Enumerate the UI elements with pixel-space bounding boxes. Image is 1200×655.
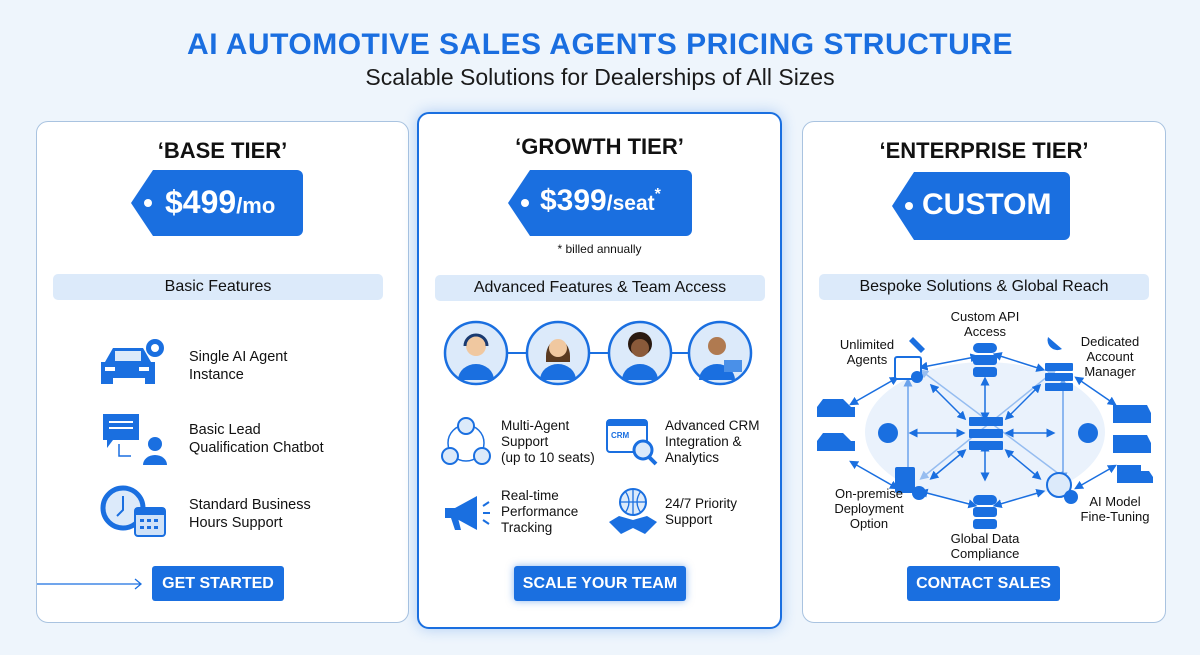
text: Real-time (501, 488, 559, 503)
text: Instance (189, 367, 244, 383)
network diagram: AI Model (1089, 494, 1141, 509)
price tag: $499/mo: $499/mo (165, 184, 275, 220)
panel: base tier (36, 121, 409, 623)
network diagram: Manager (1084, 364, 1136, 379)
price tag: custom: CUSTOM (922, 188, 1051, 221)
subtitle: Scalable Solutions for Dealerships of All Sizes (365, 64, 835, 90)
text (189, 497, 311, 531)
text: Support (501, 434, 548, 449)
icon: CRM window with magnifier: CRM (611, 431, 630, 440)
feature: CRM (606, 418, 760, 466)
text: (up to 10 seats) (501, 450, 595, 465)
network diagram: Compliance (951, 546, 1019, 561)
text: Tracking (501, 520, 552, 535)
network diagram: Unlimited (840, 337, 894, 352)
text: Performance (501, 504, 578, 519)
feature: priority support (609, 488, 737, 534)
text (189, 422, 324, 456)
text: Qualification Chatbot (189, 440, 324, 456)
feature: real-time tracking (445, 488, 578, 535)
icon: clock and calendar (100, 486, 166, 537)
button: scale your team: SCALE YOUR TEAM (523, 575, 677, 592)
button: get started: GET STARTED (162, 575, 274, 592)
text: Multi-Agent (501, 418, 569, 433)
text (665, 496, 737, 527)
band: advanced features: Advanced Features & Team Access (474, 279, 726, 296)
network diagram: Fine-Tuning (1081, 509, 1149, 524)
text (501, 488, 578, 535)
feature: multi-agent (441, 417, 595, 465)
arrow (37, 578, 142, 590)
panel: enterprise tier (802, 121, 1166, 623)
text: Hours Support (189, 515, 282, 531)
button: scale your team (514, 566, 686, 601)
network diagram: Option (850, 516, 888, 531)
button: contact sales: CONTACT SALES (916, 575, 1051, 592)
note: billed annually: * billed annually (557, 242, 642, 256)
panel: growth tier (417, 112, 782, 629)
band: basic features (53, 274, 383, 300)
network diagram: Dedicated (1081, 334, 1139, 349)
icon: megaphone (445, 496, 490, 530)
feature: single agent (101, 339, 288, 384)
feature: hours support (100, 486, 311, 537)
band: basic features: Basic Features (165, 278, 271, 295)
price tag: $499/mo (131, 170, 303, 236)
band: bespoke (819, 274, 1149, 300)
icon: globe handshake (609, 488, 657, 534)
text: Single AI Agent (189, 349, 287, 365)
text: Support (665, 512, 712, 527)
heading: growth tier: ‘GROWTH TIER’ (515, 134, 684, 159)
price tag: custom (892, 172, 1070, 240)
text: Integration & (665, 434, 742, 449)
text: 24/7 Priority (665, 496, 737, 511)
price tag: $399/seat: $399/seat* (540, 184, 661, 217)
network diagram (817, 309, 1153, 561)
button: get started (152, 566, 284, 601)
icon: CRM window with magnifier (606, 419, 658, 466)
text: Basic Lead (189, 422, 261, 438)
network diagram: Account (1087, 349, 1134, 364)
text: Standard Business (189, 497, 311, 513)
network diagram: Agents (847, 352, 888, 367)
team avatars (444, 320, 752, 386)
icon: chat and person (103, 414, 167, 465)
icon: car with gear (101, 339, 164, 384)
title: AI AUTOMOTIVE SALES AGENTS PRICING STRUCTURE (187, 28, 1013, 61)
price tag: $399/seat (508, 170, 692, 236)
text (665, 418, 760, 465)
icon: team network (441, 417, 491, 465)
network diagram: Custom API (951, 309, 1019, 324)
network diagram: Access (964, 324, 1006, 339)
heading: base tier: ‘BASE TIER’ (158, 138, 287, 163)
network diagram: Global Data (951, 531, 1020, 546)
band: bespoke: Bespoke Solutions & Global Reach (859, 278, 1109, 295)
network diagram: Deployment (834, 501, 904, 516)
feature: chatbot (103, 414, 324, 465)
text: Advanced CRM (665, 418, 760, 433)
text (189, 349, 288, 383)
text: Analytics (665, 450, 719, 465)
button: contact sales (907, 566, 1060, 601)
band: advanced features (435, 275, 765, 301)
network diagram: On-premise (835, 486, 903, 501)
heading: enterprise tier: ‘ENTERPRISE TIER’ (879, 138, 1089, 163)
text (501, 418, 595, 465)
